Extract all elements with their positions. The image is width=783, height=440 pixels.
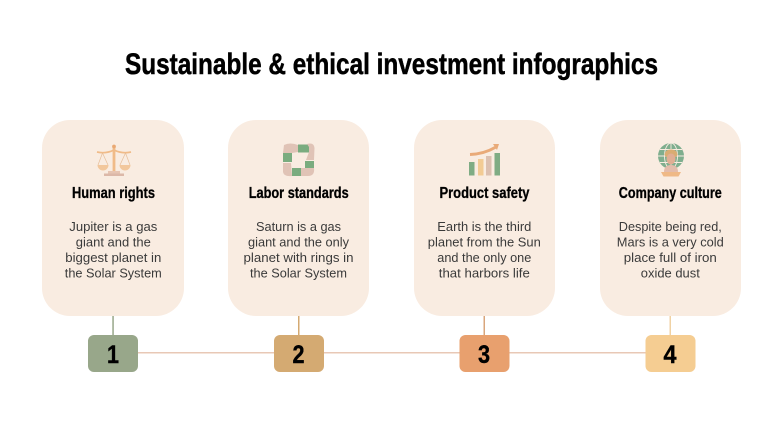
- step 4 marker: 4: [664, 341, 677, 369]
- text: product safety description: that harbors life: [439, 265, 530, 280]
- panel: company culture: [600, 120, 741, 316]
- text: company culture description: place full of iron: [624, 250, 717, 265]
- heading: company culture: Company culture: [619, 185, 722, 202]
- panel: human rights: [42, 120, 184, 316]
- heading: product safety: Product safety: [440, 185, 530, 202]
- text: human rights description: Jupiter is a gas: [69, 219, 158, 234]
- text: product safety description: planet from the Sun: [428, 234, 541, 249]
- text: company culture description: Despite being red,: [619, 219, 722, 234]
- text: labor standards description: the Solar System: [250, 265, 347, 280]
- panel: labor standards: [228, 120, 369, 316]
- text: product safety description: Earth is the third: [437, 219, 531, 234]
- icon: scales of justice: [97, 145, 131, 176]
- text: company culture description: [617, 219, 724, 280]
- icon: rising bar chart: [469, 144, 500, 176]
- text: labor standards description: [244, 219, 354, 280]
- step 1 marker: 1: [107, 341, 119, 369]
- heading: labor standards: Labor standards: [249, 185, 349, 202]
- step 3 marker: 3: [478, 341, 490, 369]
- text: human rights description: giant and the: [76, 234, 151, 249]
- text: human rights description: the Solar System: [65, 265, 162, 280]
- text: product safety description: and the only one: [437, 250, 531, 265]
- step 2 marker: 2: [292, 341, 304, 369]
- heading: human rights: Human rights: [72, 185, 155, 202]
- panel: product safety: [414, 120, 555, 316]
- icon: joined hands with money: [283, 144, 314, 176]
- text: company culture description: Mars is a very cold: [617, 234, 724, 249]
- text: labor standards description: Saturn is a gas: [256, 219, 341, 234]
- text: labor standards description: planet with rings in: [244, 250, 354, 265]
- step 2 marker: [274, 316, 324, 372]
- step 4 marker: [646, 316, 696, 372]
- text: human rights description: [65, 219, 162, 280]
- step 3 marker: [460, 316, 510, 372]
- step 1 marker: [88, 316, 138, 372]
- text: labor standards description: giant and the only: [248, 234, 349, 249]
- text: company culture description: oxide dust: [641, 265, 700, 280]
- title: Sustainable & ethical investment infographics: [125, 48, 658, 81]
- text: human rights description: biggest planet in: [65, 250, 161, 265]
- timeline connector: [113, 352, 670, 354]
- text: product safety description: [428, 219, 541, 280]
- icon: globe with person: [658, 143, 684, 176]
